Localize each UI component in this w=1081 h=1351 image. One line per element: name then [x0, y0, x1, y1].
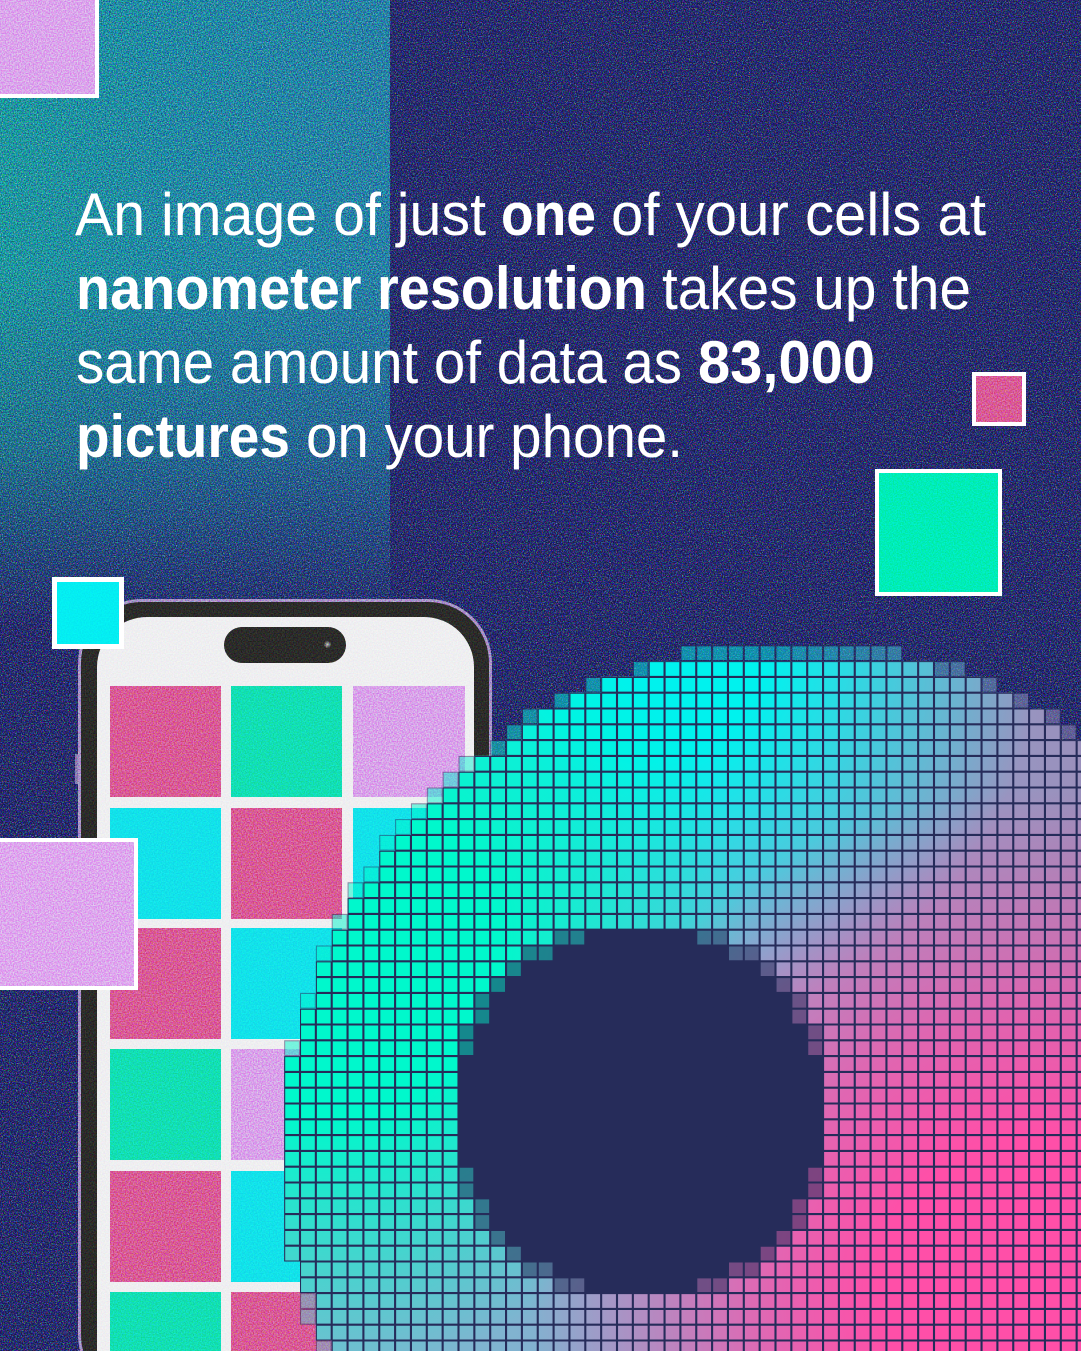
phone screen	[97, 617, 474, 1351]
line 3: same amount of data as	[76, 329, 682, 396]
line 1	[75, 181, 986, 248]
square: mint right	[875, 469, 1002, 596]
cell nucleus and pixel grid	[284, 661, 1081, 1351]
phone frame	[78, 599, 492, 1351]
square: cyan on phone corner	[52, 577, 124, 649]
phone side button	[75, 754, 78, 784]
line 4	[76, 403, 683, 470]
line 3: 83,000	[698, 329, 875, 396]
square: lilac top left	[0, 0, 99, 98]
line 1: of your cells at	[611, 181, 986, 248]
camera lens	[323, 640, 332, 649]
phone camera pill	[224, 627, 346, 663]
square: large lilac left	[0, 838, 138, 990]
cell edge: faint pixels	[284, 645, 1077, 1351]
background: teal left column	[0, 0, 390, 640]
line 2: nanometer resolution	[76, 255, 647, 322]
line 4: on your phone.	[306, 403, 683, 470]
cell body: solid pixels	[284, 661, 1081, 1351]
line 2	[76, 255, 971, 322]
square: small pink right	[972, 372, 1026, 426]
line 2: takes up the	[662, 255, 971, 322]
pixelated cell	[284, 645, 1081, 1351]
line 4: pictures	[76, 403, 290, 470]
phone	[75, 599, 492, 1351]
line 1: An image of just	[75, 181, 486, 248]
row 1 tiles	[110, 686, 221, 797]
line 1: one	[501, 181, 596, 248]
